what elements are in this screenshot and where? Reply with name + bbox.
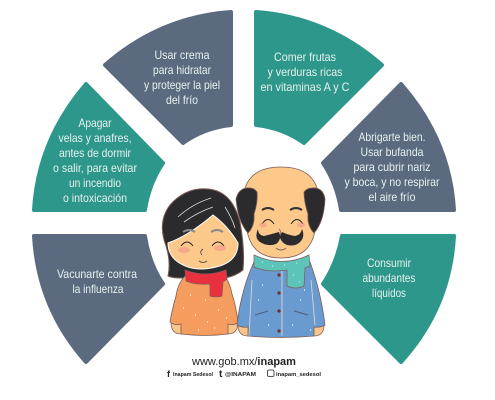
footer: website and social: @INAPAM (225, 372, 256, 378)
face (168, 215, 238, 269)
hands (238, 322, 324, 336)
scarf (185, 270, 227, 297)
panel: warm clothing: Usar bufanda (360, 145, 424, 159)
panel: hydrating cream: para hidratar (153, 63, 211, 77)
facebook: f (167, 369, 171, 379)
panel: fruits and vegetables (256, 12, 382, 143)
footer: website and social: Inapam Sedesol (173, 372, 213, 378)
hands (171, 320, 238, 334)
panel: candles and stoves: un incendio (69, 176, 121, 190)
cheeks (259, 222, 267, 228)
cheeks (178, 247, 190, 253)
panel: drink liquids: abundantes (362, 271, 416, 285)
panel: fruits and vegetables: en vitaminas A y C (260, 80, 350, 94)
panel: hydrating cream: Usar crema (154, 48, 210, 62)
panel: hydrating cream (105, 12, 231, 143)
panel: warm clothing: para cubrir nariz (354, 160, 430, 174)
mouth (276, 248, 286, 250)
eyebrows (262, 208, 302, 210)
panel: drink liquids (323, 236, 454, 362)
panel: drink liquids: Consumir (367, 256, 411, 270)
sweater dots (183, 295, 227, 330)
panel: candles and stoves: velas y anafres, (58, 131, 132, 145)
coat dots (258, 285, 311, 330)
hair strands (178, 198, 235, 228)
head (245, 167, 317, 258)
panel: flu vaccine (34, 236, 163, 362)
eyes (262, 220, 303, 224)
website: www.gob.mx/inapam (191, 356, 296, 368)
panel: flu vaccine: Vacunarte contra (57, 267, 137, 281)
pockets (255, 311, 308, 315)
panel: candles and stoves: antes de dormir (59, 146, 131, 160)
panel: candles and stoves: o salir, para evitar (53, 161, 137, 175)
panel: warm clothing: Abrigarte bien. (358, 130, 426, 144)
illustration: woman (162, 189, 244, 336)
nose and mouth (199, 249, 207, 262)
nose (279, 229, 281, 236)
panel: drink liquids: líquidos (372, 286, 406, 300)
panel: warm clothing (323, 84, 454, 210)
panel: flu vaccine: la influenza (72, 282, 124, 296)
panel: candles and stoves (34, 84, 163, 210)
scarf (254, 255, 310, 288)
panel: fruits and vegetables: Comer frutas (274, 50, 336, 64)
footer: website and social (167, 356, 321, 380)
twitter: t (219, 369, 223, 380)
eyebrows (183, 230, 223, 232)
hair (236, 188, 325, 233)
panel: warm clothing: el aire frío (368, 190, 416, 204)
panel: warm clothing: y boca, y no respirar (344, 175, 440, 189)
moustache (256, 229, 303, 246)
panel: fruits and vegetables: y verduras ricas (268, 65, 342, 79)
panel: candles and stoves: o intoxicación (63, 191, 127, 205)
panel: hydrating cream: del frío (166, 93, 198, 107)
illustration: man (236, 167, 325, 338)
scarf dots (262, 262, 300, 282)
panel: candles and stoves: Apagar (78, 116, 112, 130)
footer: website and social: inapam_sedesol (276, 372, 321, 378)
coat (237, 262, 325, 338)
instagram (268, 370, 274, 376)
hair (162, 189, 244, 278)
panel: hydrating cream: y proteger la piel (144, 78, 220, 92)
coat seam and buttons (249, 270, 315, 336)
eyes (181, 242, 224, 246)
sweater (170, 274, 238, 336)
